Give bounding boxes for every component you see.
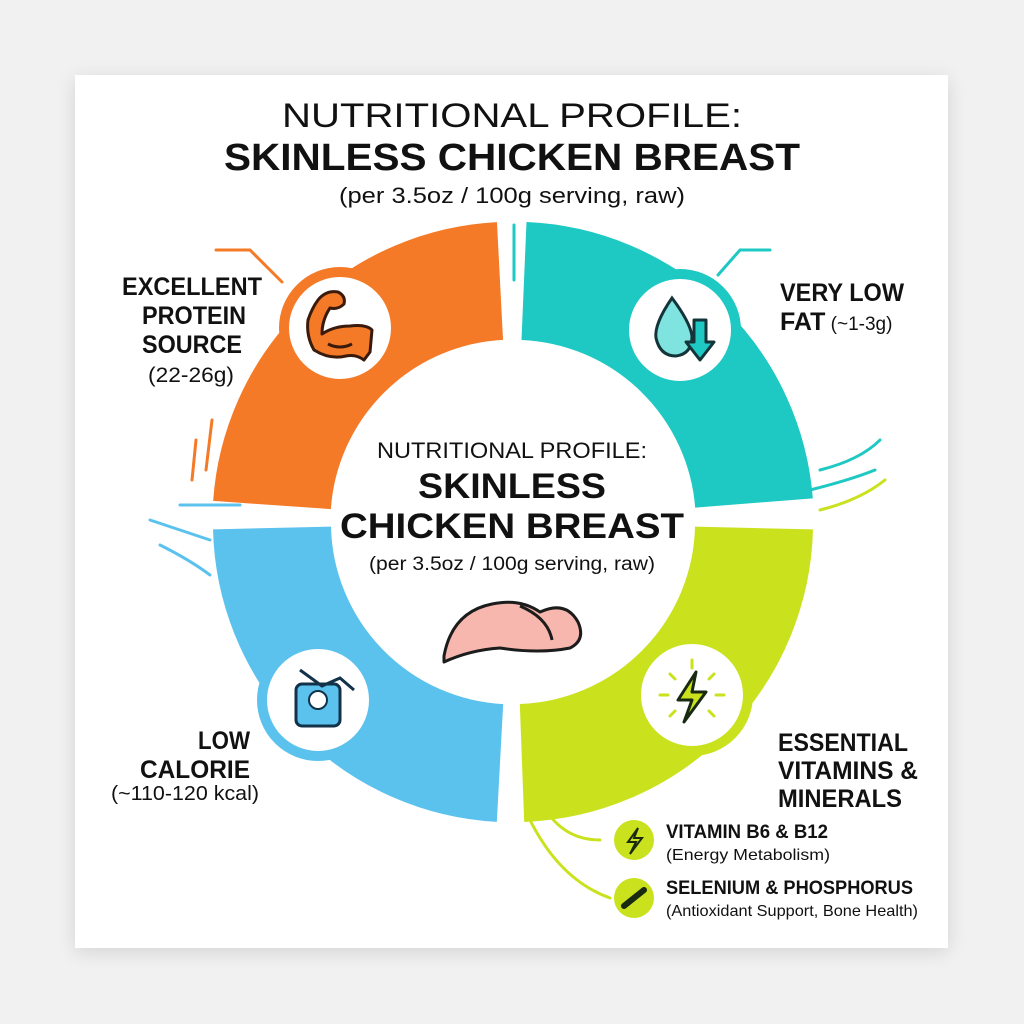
label: low calorie: CALORIE xyxy=(140,756,250,784)
label: low calorie xyxy=(111,727,259,805)
title: NUTRITIONAL PROFILE: xyxy=(282,97,742,135)
label: vitamins & minerals: VITAMINS & xyxy=(778,757,918,785)
sub-item: vitamin B6 & B12: VITAMIN B6 & B12 xyxy=(666,822,828,843)
decorative callout lines xyxy=(150,225,885,898)
label: fat: VERY LOW xyxy=(780,279,904,307)
sub-item: selenium & phosphorus xyxy=(614,878,918,920)
label: protein xyxy=(122,273,262,387)
ring: blue segment xyxy=(272,528,500,763)
label: protein: SOURCE xyxy=(142,331,242,359)
center text: CHICKEN BREAST xyxy=(340,507,684,546)
label: vitamins & minerals xyxy=(778,729,918,813)
icon: water drop with down arrow (fat) xyxy=(624,274,736,386)
label: protein: PROTEIN xyxy=(142,302,246,330)
center text: (per 3.5oz / 100g serving, raw) xyxy=(369,554,655,575)
center text xyxy=(340,438,684,575)
icon: flexed arm (protein) xyxy=(284,272,396,384)
icon: lightning (vitamins) xyxy=(636,639,748,751)
card background xyxy=(75,75,948,948)
sub-item: vitamin B6 & B12: (Energy Metabolism) xyxy=(666,847,830,864)
sub-item: vitamin B6 & B12 xyxy=(614,820,830,864)
ring: orange segment xyxy=(272,281,500,505)
label: fat: FAT (~1-3g) xyxy=(780,308,892,336)
center text: NUTRITIONAL PROFILE: xyxy=(377,438,647,463)
title: (per 3.5oz / 100g serving, raw) xyxy=(339,183,685,208)
label: fat xyxy=(780,279,904,336)
icon: chicken breast xyxy=(444,602,581,662)
sub-item: selenium & phosphorus: SELENIUM & PHOSPHORUS xyxy=(666,878,913,899)
icon: scale (calorie) xyxy=(262,644,374,756)
label: protein: (22-26g) xyxy=(148,364,234,387)
label: vitamins & minerals: MINERALS xyxy=(778,785,902,813)
title xyxy=(224,97,800,208)
label: vitamins & minerals: ESSENTIAL xyxy=(778,729,908,757)
ring: lime segment xyxy=(522,528,754,763)
sub-item: selenium & phosphorus: (Antioxidant Support, Bone Health) xyxy=(666,903,918,920)
ring: teal segment xyxy=(524,281,754,503)
title: SKINLESS CHICKEN BREAST xyxy=(224,137,800,179)
label: low calorie: LOW xyxy=(198,727,250,755)
center text: SKINLESS xyxy=(418,467,606,506)
label: protein: EXCELLENT xyxy=(122,273,262,301)
label: low calorie: (~110-120 kcal) xyxy=(111,783,259,805)
